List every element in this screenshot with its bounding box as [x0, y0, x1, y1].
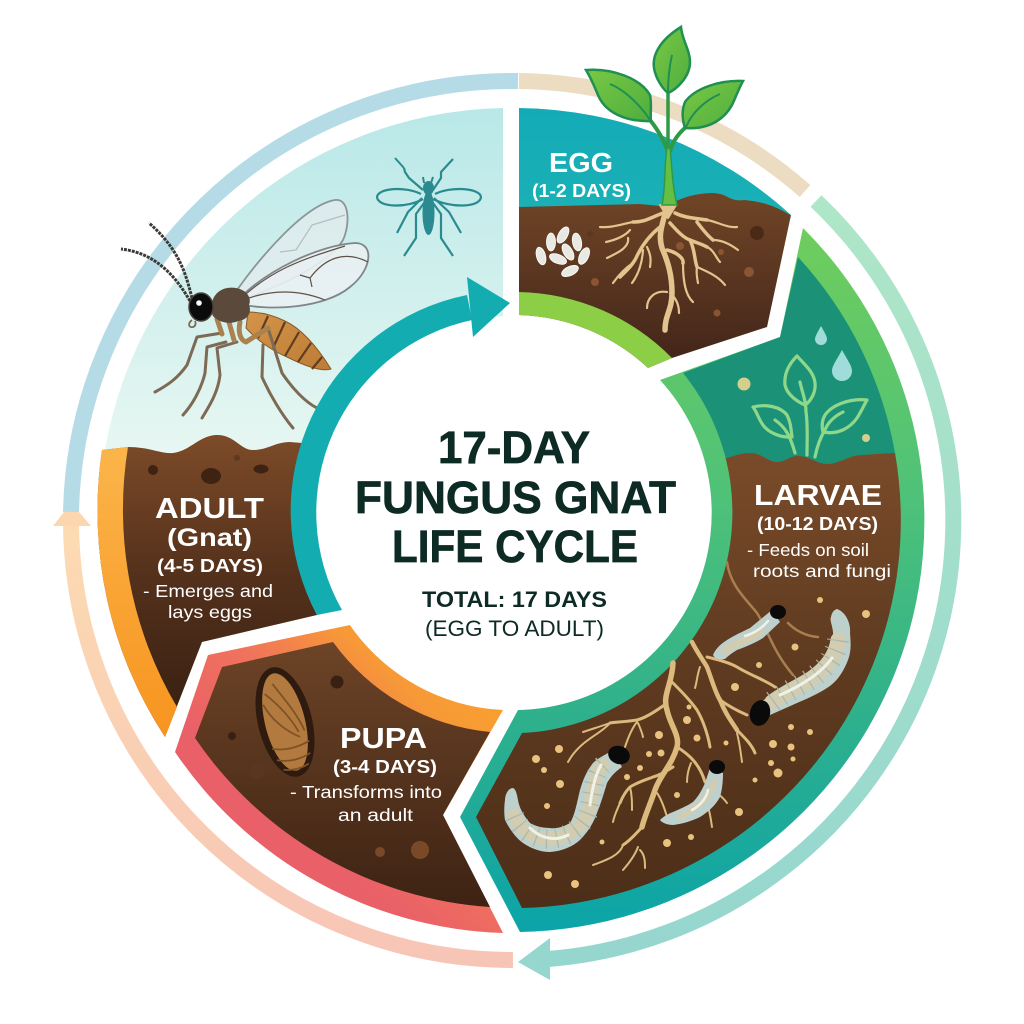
label: larvae: roots and fungi	[753, 561, 891, 581]
subtitle	[422, 587, 607, 641]
label: pupa	[290, 723, 442, 825]
label: adult: ADULT	[155, 493, 264, 525]
label: adult: lays eggs	[168, 602, 252, 622]
label: pupa: - Transforms into	[290, 782, 442, 802]
subtitle: (EGG TO ADULT)	[425, 616, 604, 641]
arrowhead: mint	[518, 938, 550, 980]
roots	[600, 205, 738, 330]
title: LIFE CYCLE	[392, 521, 638, 572]
central circle	[315, 316, 709, 710]
panel: adult soil	[97, 435, 317, 737]
arc: mint larvae	[548, 201, 953, 959]
arc: peach pupa	[71, 524, 513, 960]
label: egg: (1-2 DAYS)	[532, 181, 631, 201]
icon: pupa cocoon	[245, 661, 325, 783]
outer arrow ring	[53, 81, 953, 980]
thorax	[211, 288, 250, 323]
leaf: right	[683, 81, 743, 128]
label: egg: EGG	[549, 147, 613, 178]
head	[189, 293, 213, 321]
arc: blue adult	[71, 81, 518, 512]
label: adult	[143, 493, 273, 622]
leaf: top	[654, 27, 690, 93]
pupa soil	[195, 642, 490, 907]
larva: large right	[747, 609, 851, 728]
antennae	[121, 223, 192, 301]
arrowhead: peach	[53, 512, 91, 526]
panel: pupa	[175, 625, 503, 933]
label: larvae: LARVAE	[754, 480, 882, 512]
label: adult: (4-5 DAYS)	[157, 556, 263, 576]
roots	[568, 562, 818, 870]
label: pupa: an adult	[338, 805, 413, 825]
larva: bottom left	[504, 743, 632, 852]
label: egg	[532, 147, 631, 201]
wing: back	[237, 200, 348, 300]
icon: seedling	[586, 27, 743, 205]
eggs	[534, 225, 592, 279]
leaf: left	[586, 70, 651, 121]
arrow: teal inner cycle	[291, 277, 510, 615]
soil grains	[532, 597, 870, 888]
legs	[155, 319, 317, 428]
label: adult: (Gnat)	[167, 524, 252, 552]
icon: fungus gnat	[121, 200, 368, 428]
band: lime	[519, 292, 672, 368]
panel: egg	[519, 100, 809, 370]
label: larvae: - Feeds on soil	[747, 540, 869, 560]
panel: adult sky	[102, 108, 503, 470]
label: pupa: (3-4 DAYS)	[333, 757, 437, 777]
label: adult: - Emerges and	[143, 581, 273, 601]
label: pupa: PUPA	[340, 723, 427, 755]
band: orange	[97, 447, 177, 737]
title	[355, 422, 676, 572]
arc: tan egg	[519, 81, 805, 191]
panel: larvae	[460, 228, 924, 932]
label: larvae	[747, 480, 891, 581]
larva: top	[713, 605, 786, 659]
label: larvae: (10-12 DAYS)	[757, 514, 878, 534]
wing: front	[235, 243, 368, 308]
icon: water drops	[815, 326, 852, 381]
soil spots	[228, 676, 429, 859]
larva: bottom small	[660, 760, 725, 825]
subtitle: TOTAL: 17 DAYS	[422, 587, 607, 612]
icon: gnat silhouette	[377, 158, 481, 256]
title: 17-DAY	[438, 422, 590, 473]
soil spots	[587, 226, 764, 316]
abdomen	[246, 312, 331, 370]
title: FUNGUS GNAT	[355, 472, 676, 523]
icon: sprout outline	[753, 356, 867, 457]
soil spots	[148, 455, 268, 484]
